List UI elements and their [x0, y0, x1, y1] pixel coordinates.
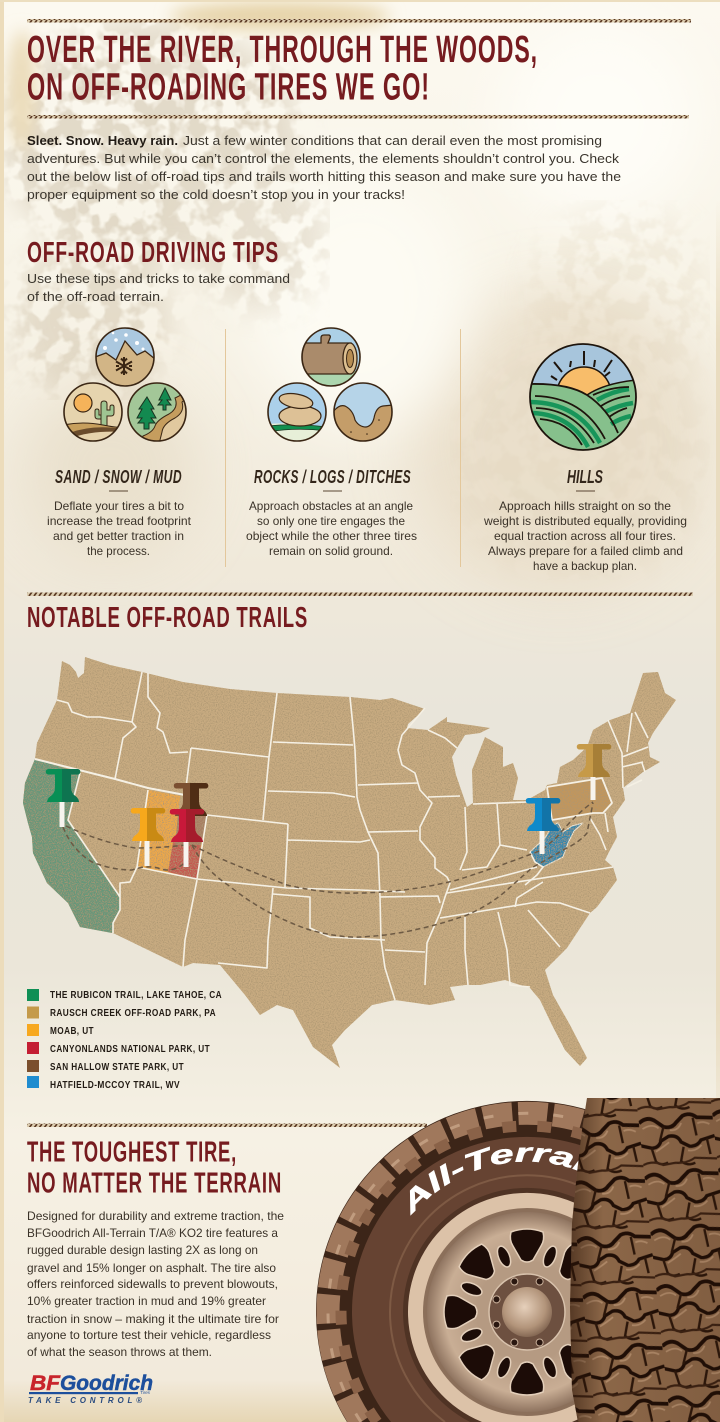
tire description: offers reinforced sidewalls to prevent blowouts, — [27, 1277, 278, 1291]
pin: Rubicon — [46, 769, 80, 827]
tire description: BFGoodrich All-Terrain T/A® KO2 tire features a — [27, 1226, 278, 1240]
tire description: anyone to torture test their vehicle, regardless — [27, 1328, 271, 1342]
logo: BFGoodrich — [28, 1372, 153, 1405]
tire description: traction in snow – making it the ultimate tire for — [27, 1312, 279, 1326]
land mass — [23, 657, 676, 1068]
logo: BFGoodrich: Tires — [140, 1390, 151, 1395]
second rope divider — [27, 115, 689, 118]
state borders — [35, 672, 648, 1000]
logo: BFGoodrich: BF — [30, 1372, 61, 1395]
legend: HATFIELD-MCCOY TRAIL, WV — [50, 1080, 180, 1091]
heading: the toughest tire: NO MATTER THE TERRAIN — [27, 1168, 282, 1200]
pin: San Hallow — [174, 783, 208, 816]
title — [27, 29, 538, 108]
tip text: sand snow mud: and get better traction in — [53, 529, 184, 543]
tire description: Designed for durability and extreme traction, the — [27, 1209, 284, 1223]
top rope divider — [27, 19, 691, 22]
legend: CANYONLANDS NATIONAL PARK, UT — [50, 1044, 210, 1055]
trails rope divider — [27, 592, 693, 596]
tip heading: hills: HILLS — [567, 467, 603, 487]
intro paragraph: adventures. But while you can’t control the elements, the elements shouldn’t control you. Check — [27, 151, 620, 166]
tip text: hills: have a backup plan. — [533, 559, 637, 573]
icon: ditch — [333, 382, 393, 442]
tip text: hills — [483, 499, 687, 573]
dotted trail routes — [63, 802, 593, 937]
pin: Hatfield-McCoy — [526, 798, 560, 854]
highlighted states — [23, 759, 612, 933]
tip rule 2 — [323, 490, 342, 492]
icon: log — [301, 327, 361, 387]
tip text: rocks logs ditches — [246, 499, 417, 558]
heading: the toughest tire: THE TOUGHEST TIRE, — [27, 1136, 237, 1168]
title: ON OFF-ROADING TIRES WE GO! — [27, 66, 430, 108]
intro paragraph — [27, 133, 621, 202]
icon: forest mud road — [127, 382, 187, 444]
legend: THE RUBICON TRAIL, LAKE TAHOE, CA — [50, 990, 222, 1001]
tip text: sand snow mud — [47, 499, 192, 558]
icon: rocks — [267, 382, 327, 442]
map of the United States — [23, 657, 676, 1068]
intro paragraph: proper equipment so the cold doesn’t stop you in your tracks! — [27, 187, 405, 202]
tip text: sand snow mud: Deflate your tires a bit to — [54, 499, 184, 513]
pin: Rausch Creek — [577, 744, 611, 800]
heading: off-road driving tips: OFF-ROAD DRIVING TIPS — [27, 237, 279, 269]
tip text: hills: weight is distributed equally, providing — [483, 514, 687, 528]
pin: Moab — [131, 808, 165, 866]
pin: Canyonlands — [170, 809, 204, 867]
tip heading: rocks logs ditches: ROCKS / LOGS / DITCHES — [254, 467, 411, 487]
tire description: rugged durable design lasting 2X as long on — [27, 1243, 258, 1257]
legend: SAN HALLOW STATE PARK, UT — [50, 1062, 184, 1073]
heading: notable off-road trails: NOTABLE OFF-ROAD TRAILS — [27, 602, 308, 634]
tips intro text: of the off-road terrain. — [27, 289, 164, 304]
intro paragraph: Sleet. Snow. Heavy rain. — [27, 133, 178, 148]
front tire tread — [570, 1098, 720, 1422]
heading: the toughest tire — [27, 1136, 282, 1200]
tip heading: sand snow mud: SAND / SNOW / MUD — [55, 467, 182, 487]
icon: desert sand — [63, 382, 123, 442]
tips intro text: Use these tips and tricks to take command — [27, 271, 290, 286]
icon: snow mountain — [95, 327, 155, 387]
tip text: hills: Always prepare for a failed climb and — [488, 544, 683, 558]
tip text: rocks logs ditches: so only one tire engages the — [257, 514, 405, 528]
tip text: rocks logs ditches: object while the other three tires — [246, 529, 417, 543]
logo: BFGoodrich: TAKE CONTROL® — [28, 1396, 142, 1405]
tip rule 1 — [109, 490, 128, 492]
tips intro text — [27, 271, 290, 304]
tip text: rocks logs ditches: remain on solid ground. — [269, 544, 393, 558]
tip text: hills: Approach hills straight on so the — [499, 499, 671, 513]
intro paragraph: out the below list of off-road tips and trails worth hitting this season and make sure you have the — [27, 169, 621, 184]
column dividers — [226, 329, 460, 567]
tip rule 3 — [576, 490, 595, 492]
tip text: sand snow mud: the process. — [87, 544, 150, 558]
intro paragraph: Just a few winter conditions that can derail even the most promising — [183, 133, 602, 148]
legend — [27, 989, 222, 1091]
tire description: gravel and 15% longer on asphalt. The tire also — [27, 1261, 276, 1275]
tire description: of what the season throws at them. — [27, 1345, 212, 1359]
tip text: rocks logs ditches: Approach obstacles at an angle — [249, 499, 413, 513]
logo: BFGoodrich: Goodrich — [60, 1372, 153, 1395]
tire photograph — [316, 1098, 720, 1422]
tire description: 10% greater traction in mud and 19% greater — [27, 1294, 266, 1308]
tire section rope divider — [27, 1124, 427, 1127]
tip text: sand snow mud: increase the tread footprint — [47, 514, 192, 528]
legend: RAUSCH CREEK OFF-ROAD PARK, PA — [50, 1008, 216, 1019]
tip text: hills: equal traction across all four tires. — [494, 529, 676, 543]
sidewall lettering: All-Terrain — [410, 1146, 578, 1216]
tire description — [27, 1209, 284, 1359]
legend: MOAB, UT — [50, 1026, 94, 1037]
side tire — [316, 1101, 720, 1422]
wheel rim — [408, 1193, 646, 1422]
icon: hills — [529, 343, 637, 451]
